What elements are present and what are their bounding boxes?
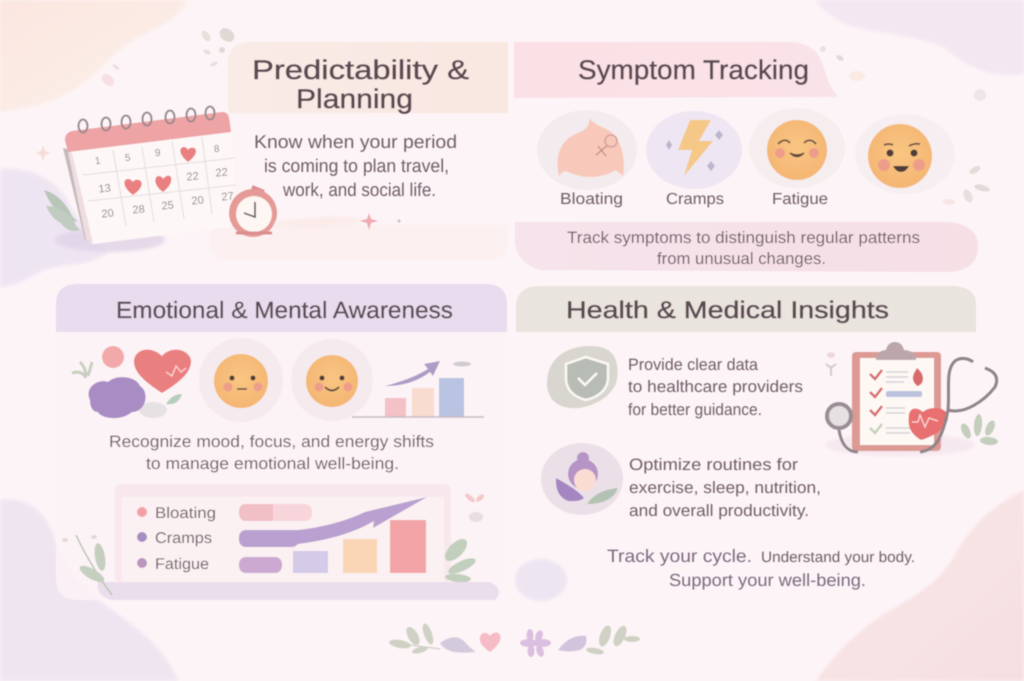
bottom decoration: leaves, heart and flower	[388, 622, 640, 658]
petals	[820, 46, 991, 205]
heading: Emotional & Mental Awareness	[116, 297, 453, 323]
icon: calendar: 27	[221, 190, 234, 204]
icon: shield	[547, 346, 618, 408]
icon: calendar: 9	[154, 148, 162, 159]
legend: Cramps	[155, 530, 212, 547]
icon: calendar: 25	[161, 199, 174, 213]
text: optimize routines: exercise, sleep, nutrition,	[629, 479, 821, 497]
heading band	[56, 284, 507, 332]
symptom labels: Fatigue	[772, 191, 828, 208]
heading: Symptom Tracking	[578, 55, 809, 85]
icon: calendar: 8	[213, 144, 221, 155]
icon: person with leaf	[541, 443, 623, 515]
icon: smiling face	[749, 108, 845, 188]
mini bar chart with arrow	[352, 361, 484, 417]
lilac blot	[515, 559, 567, 601]
icon: cramps	[646, 111, 742, 189]
closing tagline: Understand your body.	[761, 549, 915, 566]
panel: health and medical insights	[515, 286, 998, 601]
body text: Know when your period	[254, 131, 457, 152]
text: optimize routines: Optimize routines for	[629, 456, 799, 474]
heading band	[516, 286, 976, 332]
text: provide data: Provide clear data	[628, 356, 759, 374]
panel: emotional and mental awareness	[56, 284, 507, 600]
text: provide data	[628, 356, 803, 419]
icon: calendar: 1	[94, 156, 102, 167]
text banner	[515, 222, 978, 272]
closing tagline	[607, 546, 915, 590]
heading: Planning	[296, 84, 413, 114]
icon: calendar	[35, 106, 236, 252]
icon: calendar: 28	[132, 203, 145, 217]
trend arrow	[245, 497, 427, 547]
right leaves	[441, 492, 485, 583]
icon: calendar: 22	[215, 166, 228, 180]
heading: Predictability &	[252, 55, 469, 85]
body text: work, and social life.	[282, 179, 436, 200]
heading: Health & Medical Insights	[566, 297, 889, 324]
body text	[109, 433, 434, 473]
text: provide data: for better guidance.	[628, 401, 762, 419]
panel body tint	[209, 225, 508, 260]
closing tagline: Support your well-being.	[669, 570, 866, 590]
vertical bars	[293, 520, 426, 573]
symptom chart card	[62, 484, 499, 600]
floating petals	[99, 25, 237, 88]
text banner: from unusual changes.	[657, 250, 826, 268]
body text: is coming to plan travel,	[264, 155, 449, 176]
icon: calendar: 20	[191, 194, 204, 208]
icon: calendar: 22	[186, 170, 199, 184]
legend: Fatigue	[155, 556, 209, 573]
body text	[254, 131, 457, 200]
icon: happy face	[855, 114, 955, 194]
panel: predictability and planning	[35, 25, 508, 260]
icon: alarm clock	[229, 187, 277, 237]
icon: smile face	[291, 339, 373, 421]
icon: bloating	[537, 110, 637, 190]
panel: symptom tracking	[514, 42, 991, 272]
left leaves	[62, 535, 112, 595]
text: optimize routines: and overall productivity.	[629, 502, 809, 520]
heading	[252, 55, 469, 114]
icon: calendar: 13	[98, 182, 111, 196]
text banner: Track symptoms to distinguish regular patterns	[567, 229, 920, 247]
body text: Recognize mood, focus, and energy shifts	[109, 433, 434, 451]
icon: calendar: 20	[101, 207, 114, 221]
horizontal bars	[239, 504, 312, 573]
icon: clipboard and stethoscope	[825, 342, 998, 456]
legend	[137, 505, 216, 573]
text: optimize routines	[629, 456, 821, 520]
icon: calendar: 5	[124, 153, 132, 164]
closing tagline: Track your cycle.	[607, 546, 752, 566]
heading band	[228, 42, 508, 113]
star trail	[275, 213, 400, 230]
legend: Bloating	[155, 505, 216, 522]
text: provide data: to healthcare providers	[628, 378, 803, 396]
heading band	[514, 42, 838, 98]
panel body	[56, 332, 507, 600]
symptom labels	[560, 191, 828, 208]
body text: to manage emotional well-being.	[146, 455, 399, 473]
icon: brain, heart and leaves	[72, 346, 191, 418]
symptom labels: Bloating	[560, 191, 623, 208]
symptom labels: Cramps	[666, 191, 724, 208]
icon: sad face	[199, 338, 283, 422]
